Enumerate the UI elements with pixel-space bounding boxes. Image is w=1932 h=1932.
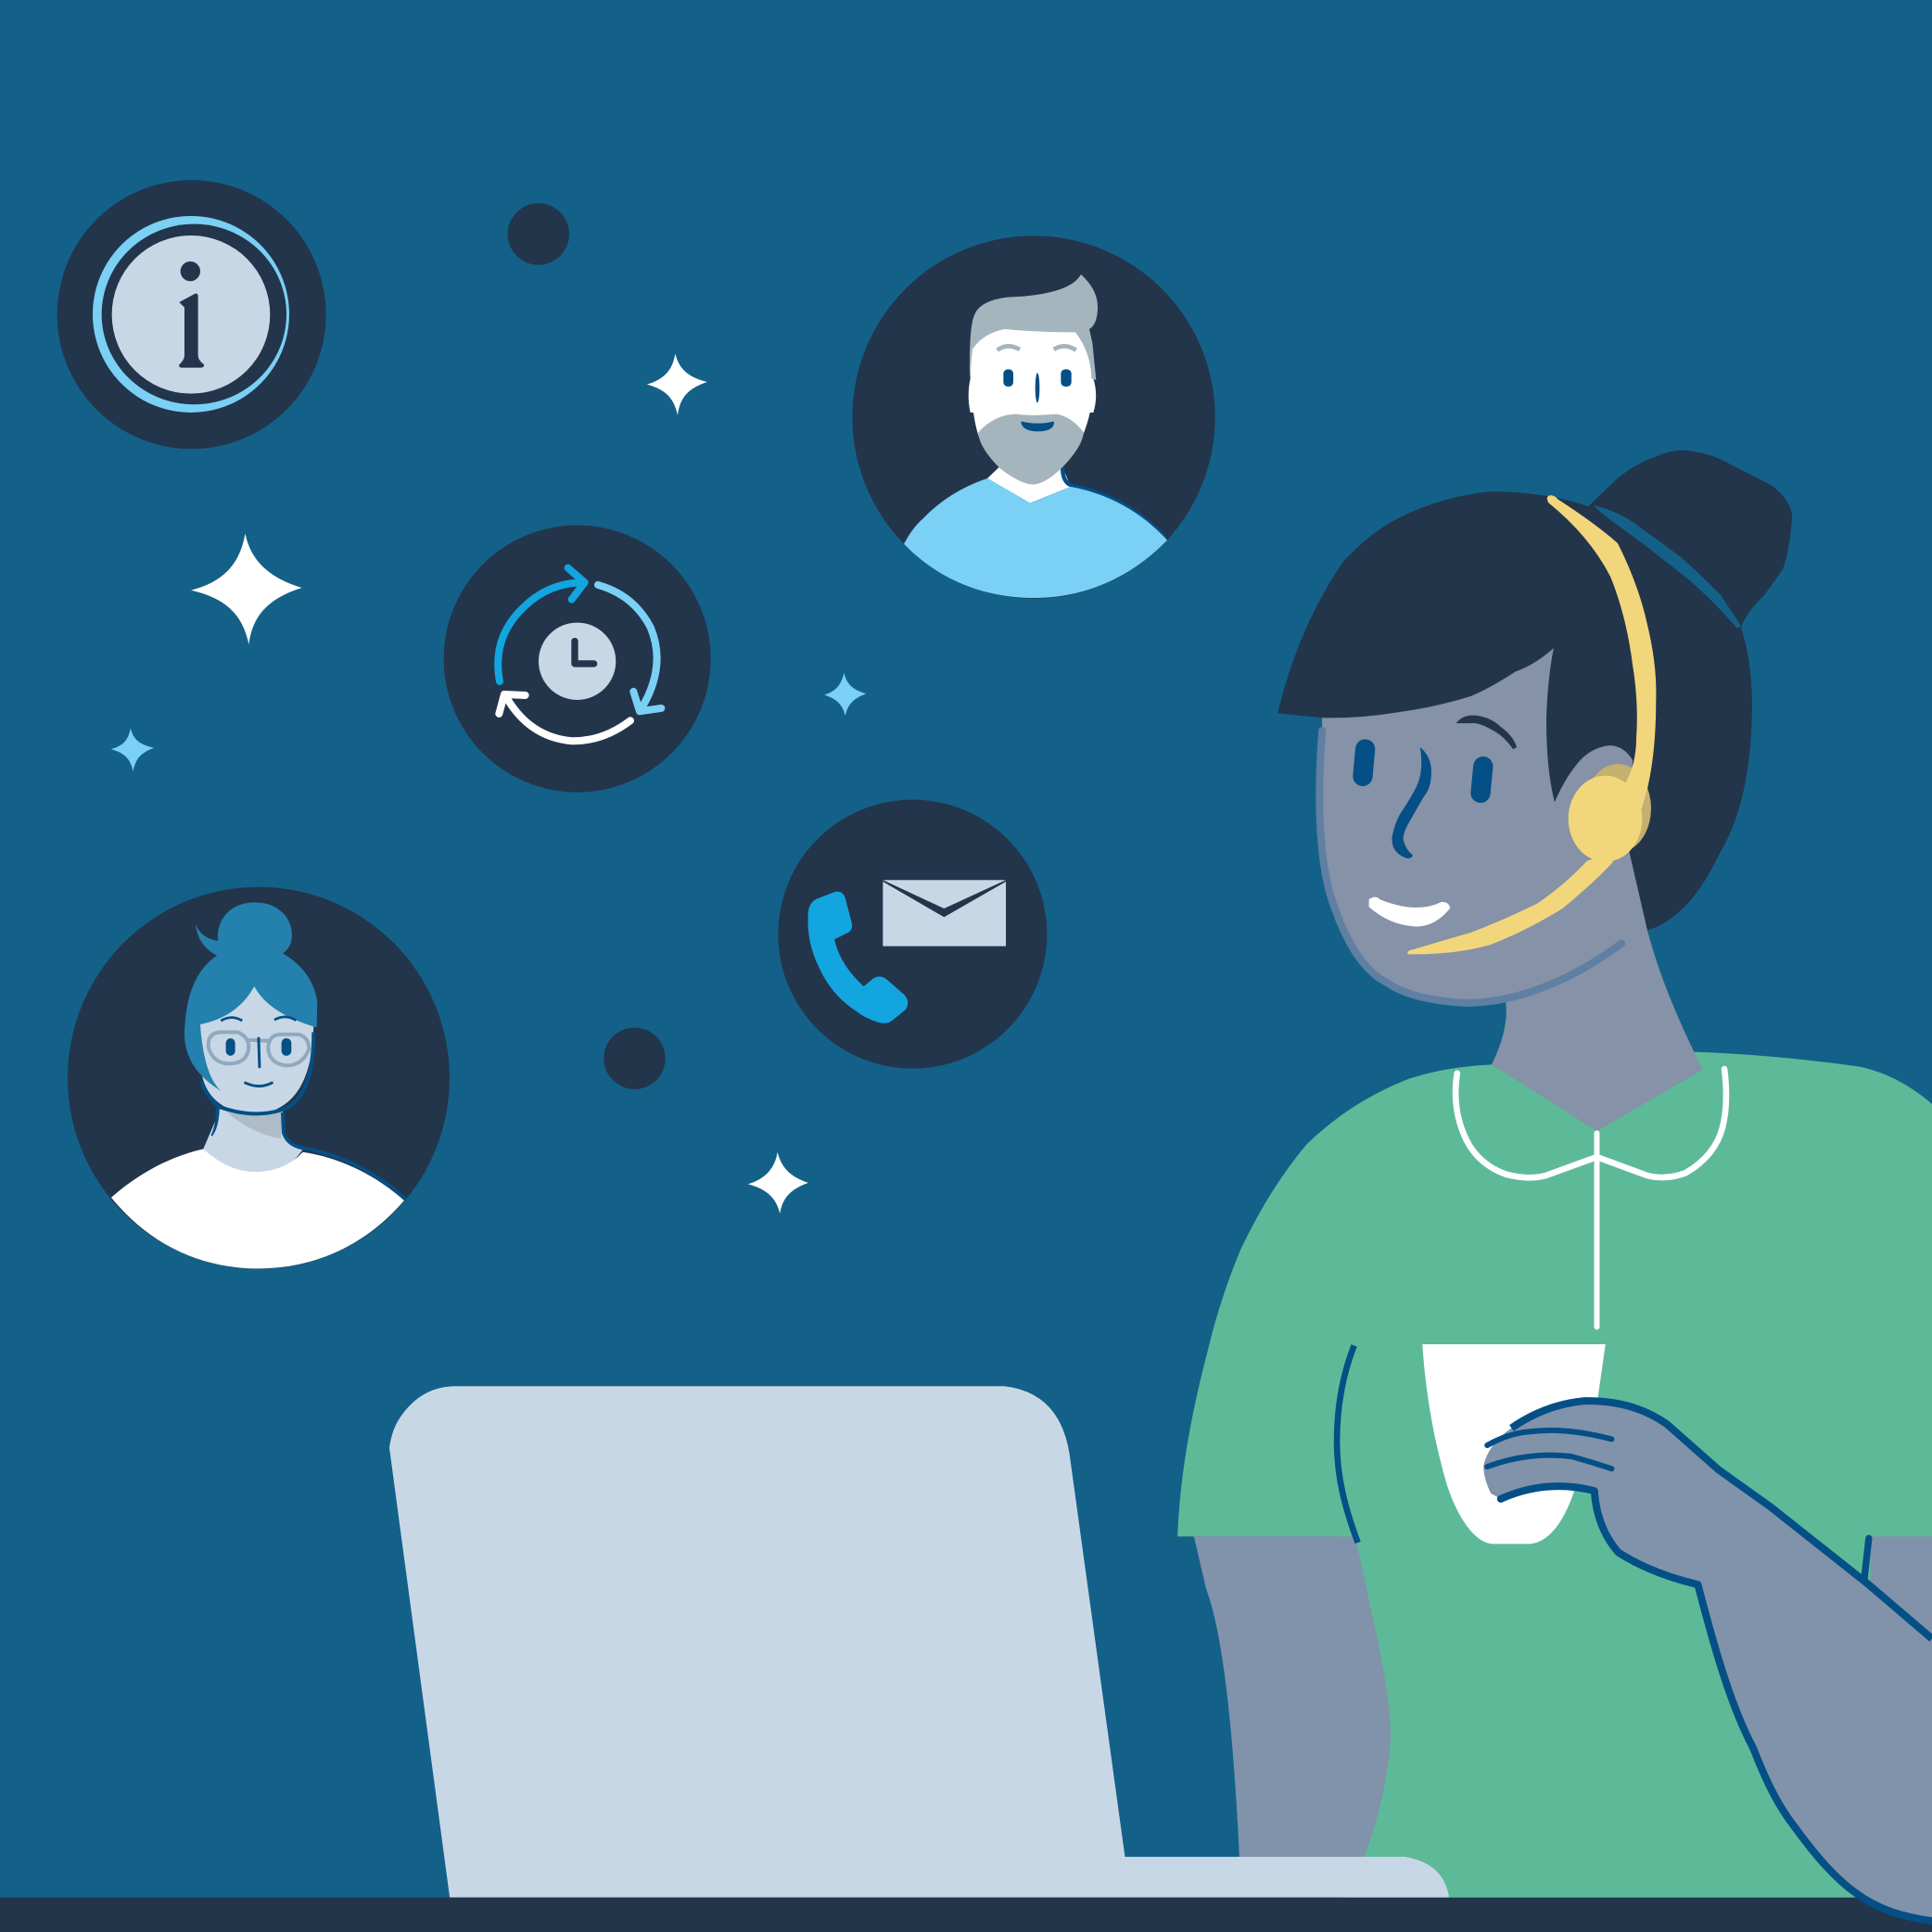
- shirt: [111, 1149, 404, 1268]
- decorative dark dot: [508, 203, 569, 265]
- agent: headset: [1407, 495, 1656, 954]
- laptop: [389, 1386, 1449, 1898]
- neck: [203, 1106, 303, 1176]
- agent: right arm and hand: [1483, 1401, 1932, 1921]
- avatar: bearded man: [852, 235, 1215, 599]
- beard: [978, 414, 1084, 485]
- avatar: woman with glasses: [68, 887, 450, 1269]
- agent: green shirt: [1177, 1052, 1932, 1932]
- shirt: [904, 478, 1167, 598]
- neck: [987, 465, 1071, 503]
- glasses: [209, 1032, 309, 1065]
- agent: hair and bun: [1277, 451, 1792, 930]
- icon: light blue sparkle centre: [824, 673, 866, 716]
- desk edge: [0, 1898, 1932, 1932]
- agent: face: [1319, 629, 1641, 1003]
- icon: white sparkle upper: [647, 353, 707, 415]
- mouth: [1023, 423, 1053, 430]
- eyes and nose: [1003, 369, 1013, 387]
- icon: clock with cycle arrows: [444, 526, 711, 793]
- icon: phone and envelope: [778, 800, 1047, 1069]
- smile: [1369, 897, 1450, 926]
- icon: white sparkle lower: [748, 1152, 808, 1214]
- eyebrows: [998, 346, 1076, 350]
- eyes, nose, mouth, brows: [226, 1038, 235, 1056]
- arm outline: [1511, 1401, 1932, 1639]
- hair: [184, 902, 317, 1091]
- eyes: [1363, 749, 1483, 793]
- icon: white sparkle large: [191, 533, 302, 644]
- face: [969, 323, 1096, 439]
- microphone boom: [1407, 850, 1617, 954]
- bun highlight: [1594, 505, 1741, 629]
- face: [200, 983, 313, 1114]
- icon: info circle: [57, 180, 326, 449]
- agent: left arm: [1194, 1536, 1391, 1861]
- decorative dark dot: [604, 1027, 666, 1089]
- face outline: [1319, 731, 1621, 1003]
- coffee cup: [1422, 1344, 1606, 1544]
- sleeve crease: [1337, 1345, 1358, 1543]
- nose: [1392, 747, 1431, 858]
- agent: neck: [1479, 838, 1703, 1131]
- finger lines: [1487, 1430, 1611, 1468]
- sleeve notch: [1864, 1538, 1869, 1580]
- icon: light blue sparkle left: [111, 728, 154, 771]
- eyebrow: [1456, 716, 1517, 749]
- hair: [970, 274, 1098, 380]
- agent: collar and placket: [1455, 1069, 1726, 1327]
